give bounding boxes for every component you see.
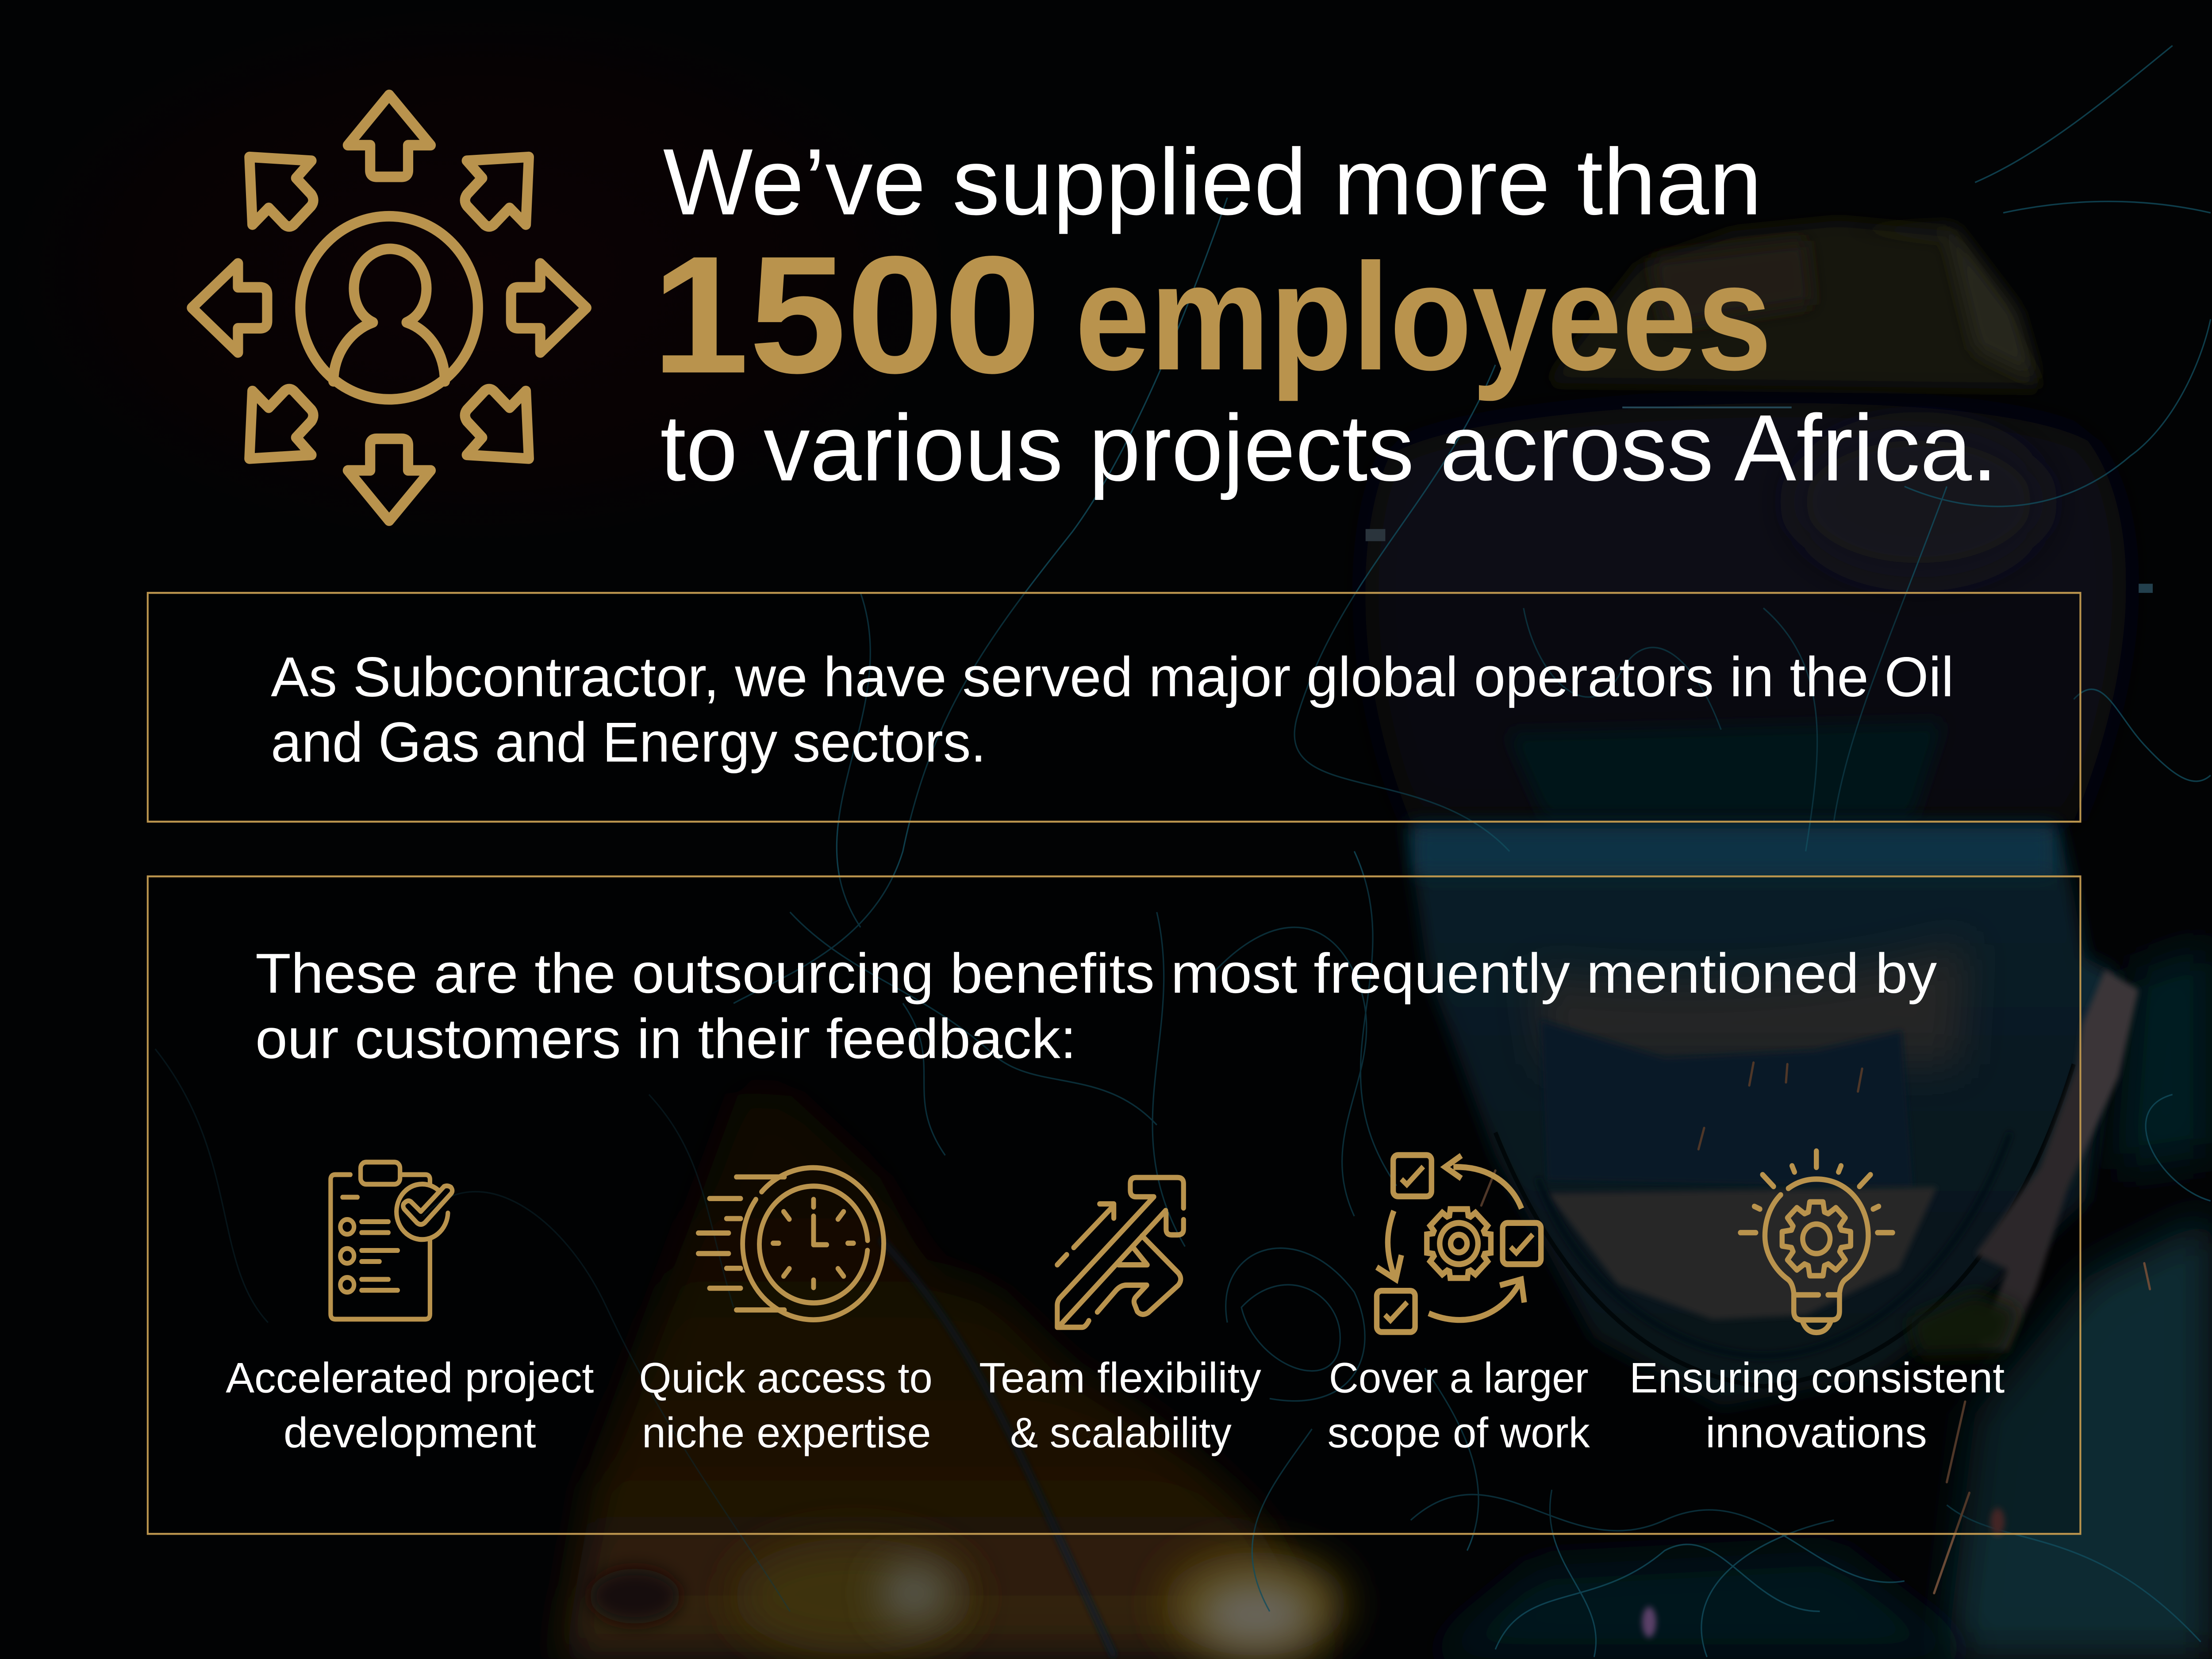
icon: clock with speed lines [698,1167,884,1320]
grey shell edge [1975,970,2139,1350]
label: team flexibility and scalability: Team flexibility [979,1354,1261,1402]
label: cover a larger scope of work [1328,1354,1590,1456]
icon: gear with cycle of checkboxes [1377,1155,1541,1332]
label: accelerated project development: development [284,1409,536,1456]
heading line 3: to various projects across Africa. [660,395,1997,500]
smoke wisps [733,46,2211,1657]
label: team flexibility and scalability: & scalability [1010,1409,1232,1456]
label: cover a larger scope of work: scope of work [1328,1409,1590,1456]
welding window [1540,1020,1913,1187]
benefits intro text: These are the outsourcing benefits most frequently mentioned by [255,942,1937,1005]
label: ensuring consistent innovations: Ensuring consistent [1629,1354,2005,1402]
heading [652,129,1997,500]
statement text: and Gas and Energy sectors. [271,710,986,773]
speckled welding mask shell [1507,722,1944,818]
statement text: As Subcontractor, we have served major global operators in the Oil [271,645,1954,708]
sparks [1481,1063,2150,1593]
label: quick access to niche expertise [639,1354,933,1456]
teal fabric lower right [1947,1216,2212,1659]
helmet body [1365,403,2126,821]
employees: employees [1075,232,1772,403]
statement text [271,645,1954,773]
label: accelerated project development: Accelerated project [226,1354,594,1402]
big number: 1500 [652,222,1041,408]
camouflage cap [1545,220,2044,389]
heading line 1: We’ve supplied more than [663,129,1762,234]
label: quick access to niche expertise: Quick access to [639,1354,933,1402]
panel: subcontractor statement [148,593,2080,822]
icon: person with eight outward arrows [192,95,586,521]
panel: outsourcing benefits [148,876,2080,1534]
orange jacket glow [565,1091,1328,1659]
icon: clipboard checklist [330,1162,452,1319]
icon: light bulb with gear [1740,1151,1893,1333]
icon: arrows upward, flexibility [1057,1178,1183,1327]
benefits intro text [255,942,1937,1070]
benefits intro text: our customers in their feedback: [255,1007,1076,1070]
label: team flexibility and scalability [979,1354,1261,1456]
label: quick access to niche expertise: niche expertise [642,1409,931,1456]
label: ensuring consistent innovations [1629,1354,2005,1456]
label: accelerated project development [226,1354,594,1456]
label: ensuring consistent innovations: innovations [1705,1409,1927,1456]
label: cover a larger scope of work: Cover a larger [1329,1354,1589,1402]
